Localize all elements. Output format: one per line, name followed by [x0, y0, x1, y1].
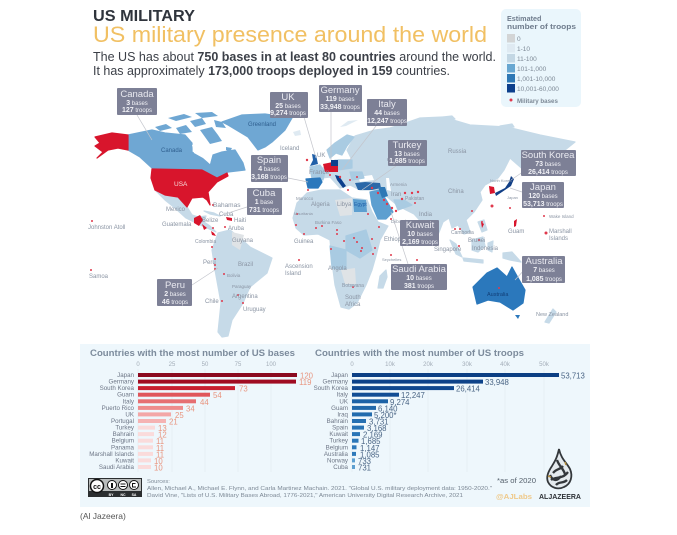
legend: estimated number of troops: number of troops — [507, 22, 576, 31]
callout: South Korea — [521, 150, 576, 176]
callout: Spain: Spain — [257, 155, 281, 166]
bars: troops: 5,200* — [374, 411, 397, 420]
sources — [147, 479, 492, 499]
callout: Germany: Germany — [320, 85, 360, 96]
land: light-blue Scandinavia, France and Poland — [310, 135, 412, 270]
map place labels: Australia — [487, 292, 509, 298]
bars: bases: 11 — [156, 437, 164, 446]
Japan — [495, 176, 514, 196]
UK — [310, 154, 318, 166]
map place labels: Guinea — [294, 239, 314, 245]
bars: troops: Kuwait — [329, 431, 348, 438]
map place labels: Morocco — [296, 196, 314, 201]
map place labels: Marshall — [549, 229, 572, 235]
bar chart: troops — [314, 348, 585, 472]
bars: troops: Turkey — [329, 438, 349, 445]
bar chart: bases — [89, 348, 314, 472]
legend: estimated number of troops: 101-1,000 — [517, 66, 547, 73]
sources: Allen, Michael A., Michael E. Flynn, and Carla Martinez Machain. 2021. "Global U.S. military deployment data: 1950-2020." — [147, 486, 492, 492]
bars: troops: Norway — [327, 457, 349, 464]
axis: troops: 20k — [423, 362, 434, 368]
logo: Al Jazeera — [539, 449, 582, 501]
bars: troops: Spain — [332, 425, 349, 432]
map place labels: Mauritania — [294, 211, 313, 216]
callout: Italy: Italy — [378, 99, 396, 110]
Philippines and Guam — [481, 219, 517, 228]
callout: Turkey: Turkey — [393, 140, 422, 151]
bars: troops: 6,140 — [378, 404, 398, 413]
callout: Cuba — [247, 188, 282, 215]
bars: troops: Italy — [337, 392, 349, 399]
callout: Cuba: 731 troops — [249, 207, 279, 214]
Hudson Bay — [192, 142, 213, 164]
callout: Cuba: Cuba — [253, 188, 276, 199]
bars: bases: 44 — [200, 398, 209, 407]
footnote: *as of 2020 — [497, 478, 536, 485]
map place labels: Angola — [328, 266, 347, 272]
map place labels: Ethiopia — [384, 237, 406, 243]
map place labels: New Zealand — [536, 312, 568, 318]
bars: bases: Bahrain — [113, 431, 135, 438]
intro text — [93, 50, 496, 78]
callout: Kuwait: 10 bases — [407, 231, 433, 238]
map place labels: Bahamas — [213, 202, 241, 209]
icon: Creative Commons badge: NC — [120, 493, 126, 497]
map place labels: South — [345, 295, 361, 301]
credit: AJLabs: @AJLabs — [496, 494, 532, 501]
land: zero-troop grey countries — [232, 198, 356, 284]
bars: bases: Japan — [117, 372, 135, 379]
callout: Germany — [319, 85, 362, 112]
map place labels: Seychelles — [382, 257, 401, 262]
intro text: It has approximately 173,000 troops deployed in 159 countries. — [93, 64, 450, 78]
military base markers — [90, 159, 548, 304]
callout: Turkey: 13 bases — [394, 151, 420, 158]
map place labels: Iceland — [280, 146, 299, 152]
map place labels: Canada — [161, 148, 183, 154]
map place labels: Mexico — [166, 207, 186, 213]
callout: Kuwait — [400, 220, 439, 246]
bars: troops: 731 — [358, 464, 371, 472]
axis: troops: 0 — [350, 362, 354, 368]
legend: estimated number of troops: 10,001-60,000 — [517, 86, 559, 93]
callout: South Korea: 73 bases — [535, 161, 561, 168]
map place labels: Uruguay — [243, 307, 266, 313]
bars: troops: 733 — [358, 457, 371, 466]
bars: bases: 11 — [156, 450, 164, 459]
Saudi Arabia and Gulf — [370, 190, 393, 219]
bars: troops: 3,168 — [367, 424, 387, 433]
callout: Peru: 46 troops — [162, 299, 188, 306]
callout: Cuba: 1 base — [255, 199, 274, 206]
axis: bases: 100 — [266, 362, 277, 368]
bars: bases: Puerto Rico — [102, 405, 135, 412]
Central America bases — [194, 215, 232, 236]
bars: bases: 10 — [154, 457, 163, 466]
USA — [151, 169, 228, 207]
world map — [88, 85, 576, 337]
bottom panel — [80, 344, 590, 507]
Spain — [306, 178, 322, 188]
legend: estimated number of troops: Military bases — [517, 98, 558, 105]
callout: Canada: Canada — [120, 89, 154, 100]
Germany blue — [331, 160, 338, 166]
map place labels: Cambodia — [451, 230, 474, 236]
bars: bases: 54 — [213, 391, 222, 400]
axis: bases: 25 — [169, 362, 176, 368]
icon: Creative Commons badge: cc — [93, 484, 101, 491]
map place labels: Ascension — [285, 264, 313, 270]
callout: Italy — [367, 99, 407, 126]
bars: troops: 9,274 — [390, 398, 410, 407]
legend: estimated number of troops: Estimated — [507, 14, 541, 23]
map place labels: Paraguay — [232, 284, 252, 289]
caption: (Al Jazeera) — [80, 511, 126, 521]
chart heading: troops: Countries with the most number of US troops — [315, 348, 524, 359]
bars: bases: 12 — [158, 431, 167, 440]
map place labels: Guyana — [232, 238, 254, 244]
bars: bases: Turkey — [115, 425, 135, 432]
bars: troops: Cuba — [333, 464, 349, 471]
seas: Black Sea and Caspian — [358, 175, 391, 191]
map place labels: Cuba — [219, 212, 234, 218]
callout: South Korea: 26,414 troops — [528, 169, 568, 176]
map place labels: Indonesia — [472, 246, 499, 252]
bars: troops: Iraq — [337, 411, 349, 418]
callout: Australia: 7 bases — [533, 267, 555, 274]
Tasmania — [515, 315, 520, 319]
kicker heading: US MILITARY — [93, 8, 195, 25]
Egypt — [353, 199, 367, 212]
bars: bases: 73 — [239, 385, 248, 394]
callout: Peru: Peru — [165, 280, 185, 291]
map place labels: USA — [174, 181, 188, 188]
bars: bases: UK — [125, 411, 135, 418]
bars: bases: 34 — [186, 404, 195, 413]
axis: troops: 30k — [462, 362, 473, 368]
callout: Canada: 3 bases — [126, 100, 148, 107]
map place labels: Algeria — [311, 202, 330, 208]
callout: Saudi Arabia: Saudi Arabia — [392, 264, 447, 275]
bars: troops — [314, 372, 585, 472]
bars: bases — [89, 372, 314, 472]
Australia — [473, 267, 525, 310]
map place labels: Armenia — [390, 182, 407, 187]
legend: estimated number of troops: 0 — [517, 36, 521, 43]
Iraq — [378, 187, 388, 198]
bars: troops: South Korea — [314, 385, 349, 392]
map place labels: France — [309, 169, 330, 176]
bars: bases: 119 — [299, 378, 311, 387]
icon: Creative Commons badge: SA — [132, 493, 137, 497]
map place labels: Guatemala — [162, 222, 192, 228]
bars: bases: 21 — [169, 418, 178, 426]
axis: bases: 0 — [136, 362, 140, 368]
callout: Italy: 44 bases — [374, 110, 400, 117]
map place labels: Guam — [508, 229, 524, 235]
callout: Germany: 119 bases — [326, 96, 354, 103]
callout: Saudi Arabia: 381 troops — [404, 283, 434, 290]
legend: estimated number of troops: 1-10 — [517, 46, 530, 53]
axis: bases: 75 — [235, 362, 242, 368]
callout: Spain — [251, 155, 288, 182]
map place labels: Brunei — [468, 238, 485, 244]
bars: troops: 53,713 — [561, 372, 585, 380]
map place labels: Island — [285, 271, 301, 277]
bars: bases: Belgium — [112, 438, 134, 445]
map place labels: China — [448, 189, 464, 195]
map place labels: North Korea — [490, 178, 512, 183]
map place labels: Egypt — [354, 202, 367, 208]
map place labels: Argentina — [232, 294, 258, 300]
callout: Canada: 127 troops — [122, 107, 152, 114]
bars: bases: Guam — [117, 392, 134, 399]
map place labels: Botswana — [342, 283, 364, 289]
callout: Peru: 2 bases — [164, 291, 186, 298]
map place labels: Colombia — [195, 239, 216, 245]
callout: Spain: 3,168 troops — [251, 174, 287, 181]
map place labels: Japan — [507, 195, 518, 200]
callout: Japan: Japan — [530, 182, 556, 193]
bars: troops: 3,731 — [369, 418, 389, 426]
map place labels: Samoa — [89, 274, 109, 280]
bars: troops: 2,169 — [363, 431, 383, 440]
callout: Japan — [522, 182, 564, 208]
axis: troops: 10k — [385, 362, 396, 368]
map place labels: Kazakhstan — [387, 157, 411, 162]
callout: Kuwait: 2,169 troops — [402, 239, 438, 246]
callout: UK: 9,274 troops — [270, 110, 306, 117]
legend: estimated number of troops: 11-100 — [517, 56, 537, 63]
map place labels: Djibouti — [391, 219, 406, 224]
map place labels: Burkina Faso — [315, 220, 342, 225]
logo: Al Jazeera: ALJAZEERA — [539, 492, 582, 501]
map place labels: Wake Island — [549, 214, 574, 219]
axis: troops: 50k — [539, 362, 550, 368]
Canadian Arctic islands — [155, 112, 232, 152]
callout: Japan: 53,713 troops — [523, 201, 563, 208]
map place labels: Singapore — [434, 247, 462, 253]
callout: UK: 25 bases — [275, 103, 301, 110]
bars: troops: Belgium — [326, 444, 348, 451]
Turkey — [355, 182, 381, 190]
sources: David Vine, "Lists of U.S. Military Bases Abroad, 1776-2021," American University Digital Research Archive, 2021 — [147, 493, 463, 499]
map place labels: UK — [317, 153, 325, 159]
Germany and Benelux — [323, 161, 338, 172]
map place labels: Greenland — [248, 122, 276, 128]
map place labels: Africa — [345, 302, 361, 308]
bars: bases: 10 — [154, 464, 163, 472]
bars: troops: 33,948 — [485, 378, 509, 387]
bars: troops: 1,085 — [360, 450, 380, 459]
bars: troops: 1,685 — [361, 437, 381, 446]
bars: bases: 11 — [156, 444, 164, 453]
axis: bases: 50 — [202, 362, 209, 368]
map place labels: Islands — [549, 236, 568, 242]
callout: UK: UK — [281, 92, 295, 103]
bars: bases: Saudi Arabia — [99, 464, 135, 471]
sources: Sources: — [147, 479, 170, 485]
map place labels: Johnston Atoll — [88, 225, 125, 231]
callout: UK — [270, 92, 308, 118]
land: Eurasia and Africa base — [155, 116, 575, 337]
callout: Saudi Arabia: 10 bases — [406, 275, 432, 282]
map place labels: Peru — [203, 260, 216, 266]
bars: bases: 120 — [300, 372, 314, 380]
bars: troops: Germany — [323, 379, 349, 386]
bars: troops: Bahrain — [327, 418, 349, 425]
bars: bases: Marshall Islands — [89, 451, 134, 458]
map place labels: Bolivia — [227, 273, 241, 278]
callout: Turkey — [388, 140, 427, 166]
map place labels: India — [419, 212, 433, 218]
Alaska — [95, 133, 128, 158]
bars: bases: Panama — [111, 444, 135, 451]
axis: troops: 40k — [500, 362, 511, 368]
bars: troops: Guam — [331, 405, 348, 412]
callout: Kuwait: Kuwait — [406, 220, 435, 231]
map place labels: Pakistan — [405, 196, 424, 202]
callout: Canada — [117, 88, 157, 115]
bars: bases: 25 — [175, 411, 184, 420]
bars: troops: Australia — [324, 451, 349, 458]
map place labels: Russia — [448, 149, 467, 155]
callout: Australia — [522, 256, 565, 283]
bars: bases: Germany — [109, 379, 135, 386]
map place labels: Brazil — [238, 262, 253, 268]
callout leader lines — [137, 112, 533, 285]
axis: troops — [350, 362, 550, 472]
callout: Saudi Arabia — [391, 264, 447, 290]
icon: Creative Commons badge — [88, 478, 142, 497]
bars: bases: Kuwait — [115, 457, 134, 464]
callout: South Korea: South Korea — [522, 150, 575, 161]
legend: estimated number of troops — [501, 9, 581, 107]
Canada — [128, 130, 245, 178]
axis: bases — [136, 362, 277, 472]
map place labels: Belize — [202, 218, 219, 224]
map place labels: Haiti — [234, 218, 246, 224]
callout: Spain: 4 bases — [258, 166, 280, 173]
bars: troops: Japan — [331, 372, 349, 379]
map place labels: Aruba — [228, 226, 245, 232]
callout: Peru — [157, 279, 192, 306]
bars: bases: Italy — [123, 398, 135, 405]
bars: troops: 12,247 — [401, 391, 425, 400]
callout: Italy: 12,247 troops — [367, 118, 407, 125]
legend: estimated number of troops: 1,001-10,000 — [517, 76, 556, 83]
chart heading: bases: Countries with the most number of US bases — [90, 348, 295, 359]
callout: Japan: 120 bases — [528, 193, 558, 200]
bars: troops: 26,414 — [456, 385, 481, 394]
South Korea — [489, 186, 495, 194]
callout: Australia: Australia — [526, 256, 563, 267]
bars: troops: UK — [339, 398, 349, 405]
bars: bases: Portugal — [111, 418, 134, 425]
bars: troops: 1,147 — [360, 444, 380, 453]
bars: bases: South Korea — [100, 385, 135, 392]
intro text: The US has about 750 bases in at least 80 countries around the world. — [93, 50, 496, 64]
map place labels: Chile — [205, 299, 219, 305]
callout: Australia: 1,085 troops — [526, 276, 562, 283]
title: US military presence around the world — [93, 22, 487, 47]
icon: Creative Commons badge: BY — [109, 493, 114, 497]
map place labels: Libya — [337, 202, 352, 208]
bars: bases: 13 — [158, 424, 167, 433]
map place labels — [88, 122, 574, 318]
map place labels: Iran — [391, 192, 401, 198]
callout: Germany: 33,948 troops — [320, 104, 360, 111]
Greenland — [222, 114, 292, 150]
callout: Turkey: 1,685 troops — [389, 158, 425, 165]
Italy — [335, 175, 346, 188]
